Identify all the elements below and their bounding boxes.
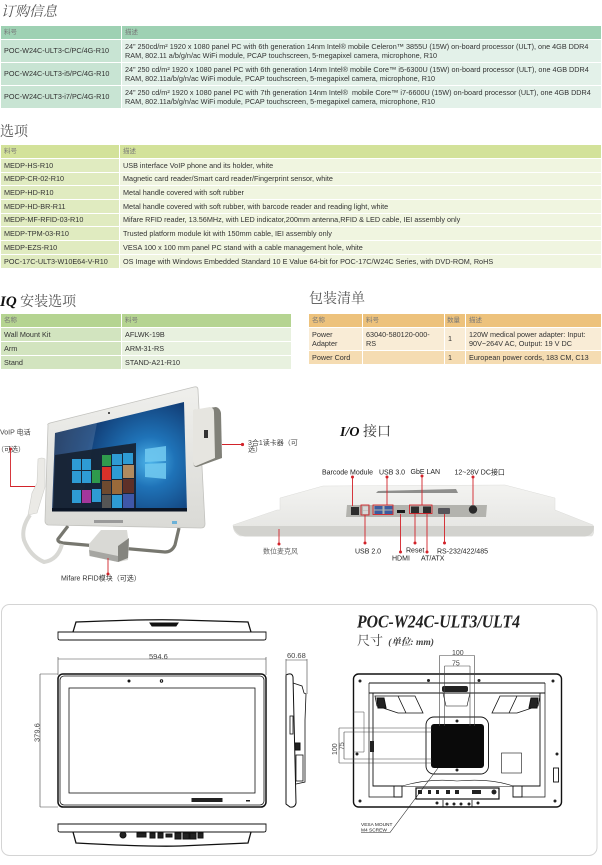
callouts: I/O: [278, 474, 474, 554]
table: ordering info: POC-W24C-ULT3-i5/PC/4G-R10: [4, 69, 109, 78]
table: ordering info: 料号: [4, 29, 17, 36]
dimension: height: 379.6: [32, 723, 42, 742]
drawing: bottom view: [58, 824, 266, 846]
table: packing list: 63040-580120-000-: [366, 330, 430, 339]
table: ordering info: [1, 26, 601, 108]
table: packing list: 数量: [447, 317, 460, 324]
callout: VESA mount: [361, 768, 438, 834]
table: ordering info: RAM, 802.11 a/b/g/n/ac WiFi module, PCAP touchscreen, 5-megapixel camera, microphone, R10: [125, 51, 437, 60]
I/O port labels: USB 2.0: [355, 548, 381, 556]
I/O port labels: AT/ATX: [421, 556, 445, 562]
product photo: panel PC front: [23, 387, 222, 562]
table: options: Mifare RFID reader, 13.56MHz, with LED indicator,200mm antenna,RFID & LED cable, IEI assembly only: [123, 215, 460, 224]
subtitle: dimensions: 尺寸 (单位: mm): [357, 633, 434, 648]
label: RFID: Mifare RFID模块（可选）: [61, 574, 141, 582]
table: options: Trusted platform module kit with 150mm cable, IEI assembly only: [123, 229, 332, 238]
table: options: [1, 145, 601, 268]
table: options: VESA 100 x 100 mm panel PC stand with a cable management hole, white: [123, 243, 363, 252]
heading: iQ install options: IQ 安装选项: [0, 294, 76, 310]
table: options: Magnetic card reader/Smart card reader/Fingerprint sensor, white: [123, 174, 333, 183]
VoIP phone: [28, 458, 45, 515]
table: options: Metal handle covered with soft rubber: [123, 188, 244, 197]
table: ordering info: RAM, 802.11a/b/g/n/ac WiFi module, PCAP touchscreen, 5-megapixel camera, microphone, R10: [125, 74, 435, 83]
drawing: rear view: [354, 674, 562, 807]
label: card reader: 3合1读卡器（可: [248, 438, 298, 447]
dimension: width: [58, 652, 266, 675]
product photo: panel PC rear I/O: [233, 485, 594, 536]
I/O port labels: RS-232/422/485: [437, 548, 488, 556]
ports: [351, 507, 359, 515]
table: options: MEDP-MF-RFID-03-R10: [4, 215, 83, 224]
callout: VESA mount: M4 SCREW: [361, 828, 387, 834]
table: packing list: 1: [448, 334, 452, 343]
table: ordering info: RAM, 802.11a/b/g/n/ac WiFi module, PCAP touchscreen, 5-megapixel camera, microphone, R10: [125, 97, 435, 106]
table: install options: STAND-A21-R10: [125, 358, 180, 367]
callout: VESA mount: VESA MOUNT: [361, 822, 393, 828]
table: packing list: 名称: [312, 317, 325, 324]
table: options: Metal handle covered with soft rubber, with barcode reader and reading light, white: [123, 202, 388, 211]
table: packing list: Power: [312, 330, 333, 339]
table: install options: Wall Mount Kit: [4, 330, 50, 339]
table: options: 描述: [123, 148, 136, 155]
drawing: front view: [58, 674, 266, 807]
stand handle: [58, 526, 179, 552]
dimension: VESA vertical: 75: [339, 742, 346, 750]
drawing: top view: [58, 620, 266, 640]
table: options: MEDP-CR-02-R10: [4, 174, 64, 183]
windows logo: [145, 446, 166, 479]
bezel: [45, 387, 205, 528]
label: VoIP phone: VoIP 电话: [0, 428, 31, 436]
title: model: POC-W24C-ULT3/ULT4: [356, 612, 520, 632]
I/O port labels: 数位麦克风: [263, 546, 298, 556]
table: packing list: [309, 314, 601, 364]
table: packing list: Adapter: [312, 339, 337, 348]
dimension: VESA vertical: 100: [332, 743, 339, 755]
table: install options: Arm: [4, 344, 17, 353]
table: packing list: RS: [366, 339, 376, 348]
start menu: [53, 443, 136, 511]
I/O plate: [346, 505, 487, 517]
table: packing list: Power Cord: [312, 353, 350, 362]
table: options: OS Image with Windows Embedded Standard 10 E Value 64-bit for POC-17C/W24C Series, with DVD-ROM, RoHS: [123, 257, 493, 266]
dimension: VESA horizontal: [440, 650, 474, 726]
table: ordering info: 描述: [125, 29, 138, 36]
dimension: VESA vertical: [332, 712, 432, 763]
dimension: depth: 60.68: [287, 651, 306, 660]
dimension: depth: [286, 651, 307, 694]
card reader: [193, 407, 222, 467]
table: options: 料号: [4, 148, 17, 155]
table: options: POC-17C-ULT3-W10E64-V-R10: [4, 257, 108, 266]
table: ordering info: 24” 250cd/m² 1920 x 1080 panel PC with 6th generation 14nm Intel® mobile Celeron™ 3855U (15W) on-board processor (ULT), one 4GB DDR4: [125, 42, 588, 51]
table: options: USB interface VoIP phone and its holder, white: [123, 161, 273, 170]
table: install options: Stand: [4, 358, 23, 367]
drawing: side view: [286, 674, 306, 807]
table: install options: ARM-31-RS: [125, 344, 164, 353]
table: ordering info: 24” 250 cd/m² 1920 x 1080 panel PC with 6th generation 14nm Intel® mobile Core™ i5-6300U (15W) on-board processor (ULT), one 4GB DDR4: [125, 65, 589, 74]
table: install options: 名称: [4, 317, 17, 324]
table: ordering info: POC-W24C-ULT3-i7/PC/4G-R10: [4, 92, 109, 101]
table: ordering info: POC-W24C-ULT3-C/PC/4G-R10: [4, 46, 109, 55]
table: packing list: 120W medical power adapter: Input:: [469, 330, 585, 339]
I/O port labels: [263, 468, 505, 562]
table: install options: 料号: [125, 317, 138, 324]
dimension: VESA horizontal: 75: [452, 660, 460, 668]
camera: [108, 412, 110, 414]
table: options: MEDP-HD-BR-R11: [4, 202, 66, 211]
dimension: width: 594.6: [149, 652, 168, 661]
I/O port labels: USB 3.0: [379, 470, 405, 476]
I/O port labels: 12~28V DC接口: [454, 468, 505, 476]
table: options: MEDP-HS-R10: [4, 161, 53, 170]
table: options: MEDP-HD-R10: [4, 188, 54, 197]
label: card reader: 选）: [248, 444, 262, 454]
heading: options: 选项: [0, 125, 28, 140]
table: packing list: 90V~264V AC, Output: 19 V DC: [469, 339, 572, 348]
I/O port labels: GbE LAN: [410, 469, 440, 476]
I/O port labels: HDMI: [392, 556, 410, 562]
table: packing list: 描述: [469, 317, 482, 324]
label: card reader: [248, 438, 298, 454]
callouts: photo: [9, 443, 244, 576]
heading: I/O: I/O 接口: [339, 423, 391, 440]
table: packing list: European power cords, 183 CM, C13: [469, 353, 589, 362]
vent: [376, 489, 458, 493]
screen: [52, 402, 187, 511]
table: ordering info: 24” 250 cd/m² 1920 x 1080 panel PC with 7th generation 14nm Intel® mobile Core™ i7-6600U (15W) on-board processor (ULT), one 4GB DDR4: [125, 88, 591, 97]
table: options: MEDP-EZS-R10: [4, 243, 57, 252]
heading: packing list: 包装清单: [309, 292, 365, 307]
table: install options: AFLWK-19B: [125, 330, 165, 339]
I/O port labels: Barcode Module: [322, 470, 373, 476]
table: options: MEDP-TPM-03-R10: [4, 229, 69, 238]
I/O port labels: Reset: [406, 548, 424, 554]
heading: ordering info: 订购信息: [1, 5, 57, 20]
table: packing list: 1: [448, 353, 452, 362]
dimension: height: [32, 674, 58, 807]
stand base: [89, 530, 129, 562]
table: packing list: 料号: [366, 317, 379, 324]
dimension: VESA horizontal: 100: [452, 650, 464, 657]
panel outline: [2, 604, 597, 856]
table: install options: [1, 314, 291, 369]
